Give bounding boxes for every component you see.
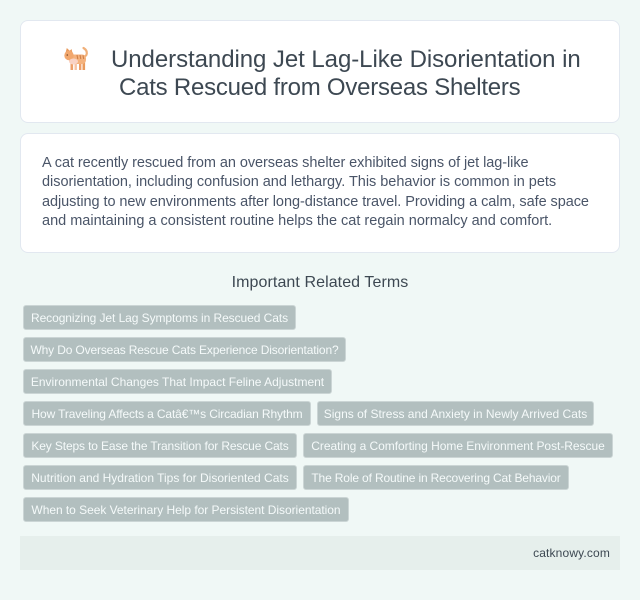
icon: cat — [64, 46, 88, 70]
tag: Environmental Changes That Impact Feline Adjustment — [31, 375, 324, 389]
panel: description — [20, 133, 620, 253]
footer source: catknowy.com — [533, 546, 610, 560]
tag: Why Do Overseas Rescue Cats Experience Disorientation? — [30, 343, 339, 357]
tag — [23, 497, 349, 522]
tag — [317, 401, 594, 426]
tag: Recognizing Jet Lag Symptoms in Rescued Cats — [31, 311, 288, 325]
description text: A cat recently rescued from an overseas shelter exhibited signs of jet lag-like — [42, 155, 528, 171]
title line 2: Cats Rescued from Overseas Shelters — [119, 74, 520, 101]
tag — [23, 433, 297, 458]
tag: When to Seek Veterinary Help for Persistent Disorientation — [31, 503, 341, 517]
tag — [23, 369, 332, 394]
tag — [23, 337, 346, 362]
description text: disorientation, including confusion and lethargy. This behavior is common in pets — [42, 174, 556, 190]
description text: adjusting to new environments after long-distance travel. Providing a calm, safe space — [42, 194, 589, 210]
tag — [23, 401, 311, 426]
tag: Nutrition and Hydration Tips for Disoriented Cats — [31, 471, 289, 485]
footer bar — [20, 536, 620, 570]
tag — [303, 465, 569, 490]
tag: Key Steps to Ease the Transition for Rescue Cats — [31, 439, 289, 453]
tag: How Traveling Affects a Catâ€™s Circadian Rhythm — [32, 407, 302, 421]
tag — [23, 465, 297, 490]
tag — [23, 305, 296, 330]
panel: title card — [20, 20, 620, 123]
tag: The Role of Routine in Recovering Cat Behavior — [311, 471, 561, 485]
tag: Signs of Stress and Anxiety in Newly Arrived Cats — [324, 407, 587, 421]
tag: Creating a Comforting Home Environment Post-Rescue — [311, 439, 605, 453]
title line 1: Understanding Jet Lag-Like Disorientation in — [111, 46, 581, 73]
tag — [303, 433, 613, 458]
description text: and maintaining a consistent routine helps the cat regain normalcy and comfort. — [42, 213, 552, 229]
tag list — [23, 305, 613, 522]
heading: related terms: Important Related Terms — [232, 274, 408, 291]
description text — [42, 155, 589, 229]
